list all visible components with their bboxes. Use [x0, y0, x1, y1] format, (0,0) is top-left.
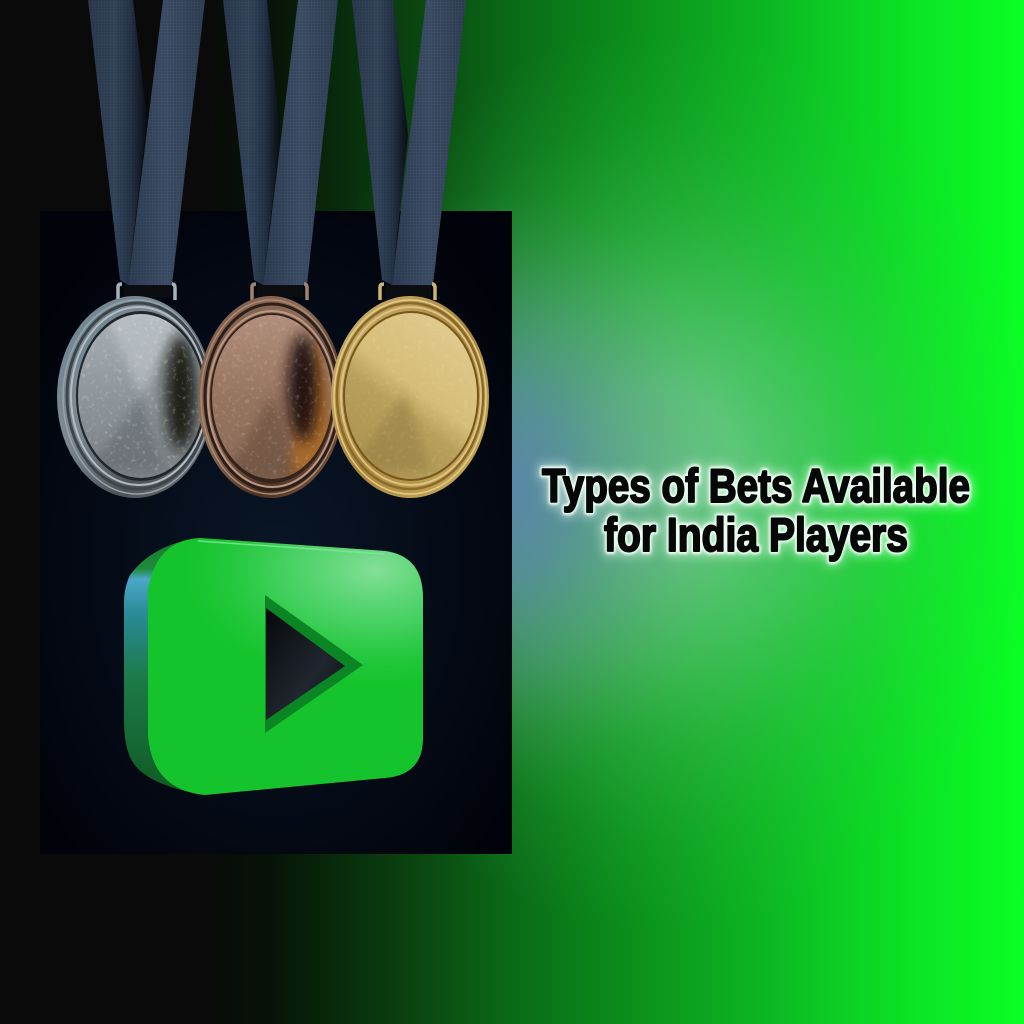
- icon: 3D green play button: [124, 538, 423, 795]
- play triangle recess: [266, 608, 345, 720]
- medal: gold: [331, 284, 489, 498]
- button top edge highlight: [198, 541, 384, 554]
- button front face: [148, 538, 423, 795]
- title: [542, 459, 970, 561]
- title soft glow: [542, 459, 970, 561]
- ribbon: bronze medal: [223, 0, 338, 285]
- button side edge: [124, 538, 205, 795]
- ribbon: gold medal: [352, 0, 466, 285]
- ribbons: [88, 0, 466, 285]
- title soft glow: for India Players: [604, 508, 908, 561]
- medal: silver: [57, 284, 213, 498]
- panel: dark medal card: [40, 211, 512, 854]
- play triangle bevel: [265, 595, 363, 733]
- title outline: [542, 459, 970, 561]
- title text: [542, 459, 970, 561]
- button top-right sheen: [148, 538, 423, 795]
- title outline: for India Players: [604, 508, 908, 561]
- medal: bronze: [198, 284, 344, 498]
- title text: for India Players: [604, 508, 908, 561]
- ribbon: silver medal: [88, 0, 205, 285]
